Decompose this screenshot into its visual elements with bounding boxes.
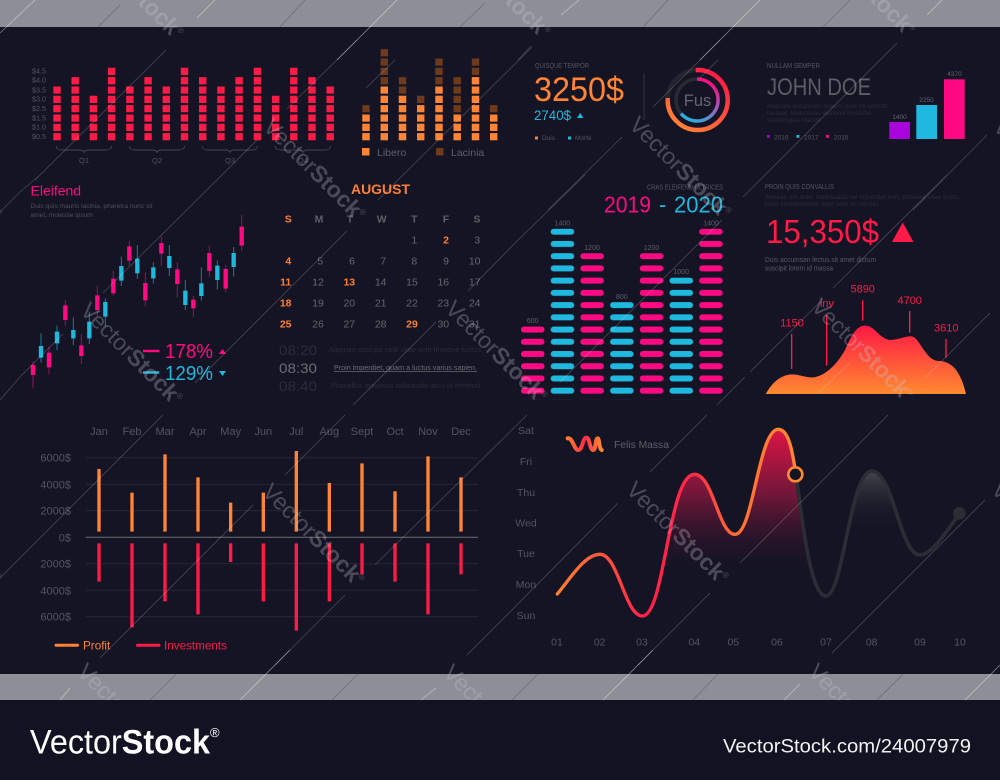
dates: 20 <box>343 298 355 310</box>
watermarks: VectorStock <box>72 658 181 767</box>
weekday headers: S <box>285 214 292 226</box>
watermarks: ® <box>907 22 918 33</box>
dates: 12 <box>312 276 324 288</box>
quarter labels <box>79 156 308 165</box>
month labels: Mar <box>156 426 175 438</box>
y axis labels: 4000$ <box>40 585 71 597</box>
pill values <box>527 220 719 325</box>
x axis numbers: 06 <box>771 637 783 649</box>
schedule: 08:40: 08:40 <box>279 378 317 394</box>
heading: QUISQUE TEMPOR <box>535 63 589 70</box>
panel: stacked square bars <box>362 49 494 159</box>
faint description: laoreet. Maecenas eleifend molestie <box>767 110 871 117</box>
panel: felis massa line chart <box>515 425 966 649</box>
faint description: Nam condimentum eget sem ut ultricies <box>765 201 880 208</box>
legend: libero: Libero <box>377 147 406 159</box>
bottom grey band <box>0 674 1000 700</box>
dates: 18 <box>280 298 292 310</box>
pill values: 600 <box>527 318 539 325</box>
dates: 17 <box>469 276 481 288</box>
legend label: Felis Massa <box>614 440 669 451</box>
dates: 25 <box>280 318 292 330</box>
faint description: Aenean elit ante, malesuada vel imperdiet non, posuere vitae turpis <box>765 194 960 201</box>
watermarks: ® <box>174 391 185 402</box>
quarter braces <box>56 146 331 153</box>
dates: 26 <box>312 318 324 330</box>
weekday headers: F <box>443 214 450 226</box>
dates: 29 <box>406 318 418 330</box>
x axis numbers: 01 <box>551 637 563 649</box>
pill columns <box>521 229 723 400</box>
dates: 13 <box>343 276 355 288</box>
main value: 3250$ <box>534 71 624 109</box>
dates: 6 <box>349 256 355 268</box>
y axis labels: 6000$ <box>40 453 71 465</box>
x axis numbers <box>551 637 966 649</box>
dates: 30 <box>437 318 449 330</box>
watermarks: ® <box>539 389 550 400</box>
footer image id: VectorStock.com/24007979 <box>723 737 971 758</box>
month title: AUGUST <box>351 181 410 197</box>
dates: 8 <box>411 256 417 268</box>
eyebrow: NULLAM SEMPER <box>767 63 820 70</box>
y axis labels: $4.0 <box>32 76 46 85</box>
quarter labels: Q4 <box>298 156 308 165</box>
pill values: 1400 <box>555 220 570 228</box>
legend: investments: Investments <box>164 640 227 653</box>
panel: 2019-2020 pill chart <box>521 184 723 400</box>
x axis numbers: 08 <box>866 637 878 649</box>
area chart <box>766 300 966 394</box>
panel: profit and investments chart <box>40 426 478 653</box>
dates: 22 <box>406 298 418 310</box>
weekday headers: T <box>347 214 354 226</box>
dates: 27 <box>343 318 355 330</box>
area labels <box>780 284 959 334</box>
schedule: 08:30 <box>279 360 477 376</box>
panel: candlestick chart <box>30 182 242 388</box>
description: Duis accumsan lectus sit amet dictum <box>765 257 876 264</box>
area labels: inv <box>820 298 835 310</box>
y axis labels <box>32 67 46 141</box>
dates: 16 <box>437 276 449 288</box>
panel: calendar <box>279 181 482 394</box>
pill values: 1400 <box>703 220 719 228</box>
x axis numbers: 10 <box>954 637 966 649</box>
bar chart: yearly: 2250 <box>919 97 934 104</box>
legend: morbi: Morbi <box>575 135 591 142</box>
y axis days <box>515 425 537 622</box>
dates: 5 <box>317 256 323 268</box>
dates: 14 <box>375 276 387 288</box>
month labels: Jul <box>289 426 303 438</box>
dates: 31 <box>469 318 481 330</box>
panel: john doe <box>767 63 965 142</box>
schedule: 08:40 <box>279 378 480 394</box>
weekday headers: S <box>473 214 481 226</box>
y axis labels: $2.5 <box>32 104 46 113</box>
footer logo: VectorStock <box>30 724 210 762</box>
dates: 1 <box>411 234 417 246</box>
month labels: Feb <box>123 426 141 438</box>
dates: 19 <box>312 298 324 310</box>
legend: profit: Profit <box>83 640 111 653</box>
faint description <box>765 194 960 208</box>
y axis labels <box>40 453 71 624</box>
y axis days: Mon <box>516 579 536 591</box>
x axis numbers: 09 <box>914 637 926 649</box>
watermarks: ® <box>356 572 367 583</box>
dates: 3 <box>474 234 480 246</box>
area labels: 4700 <box>897 295 922 307</box>
dates: 15 <box>406 276 418 288</box>
eyebrow: PROIN QUIS CONVALLIS <box>765 184 834 191</box>
watermarks: VectorStock <box>803 658 912 767</box>
description <box>30 203 153 219</box>
watermarks: ® <box>542 24 553 35</box>
legend: years: 2016 <box>774 134 789 142</box>
month labels: Sept <box>351 426 373 438</box>
month labels: Oct <box>386 426 404 438</box>
y axis labels: $3.5 <box>32 85 46 94</box>
year range heading <box>604 192 723 218</box>
pill values: 1200 <box>584 245 600 252</box>
y axis days: Thu <box>517 487 535 499</box>
watermarks: ® <box>723 205 734 216</box>
watermarks: ® <box>357 207 368 218</box>
description <box>765 257 876 272</box>
month labels <box>90 426 471 438</box>
schedule: 08:40: Phasellus maximus sollicitudin arcu id eleifend <box>331 383 480 390</box>
panel: quarterly square bars <box>32 67 331 165</box>
year range heading: - <box>659 192 666 218</box>
quarter labels: Q2 <box>152 156 162 165</box>
stat: 178 percent <box>143 341 226 363</box>
y axis labels: 2000$ <box>40 506 71 518</box>
top grey band <box>0 0 1000 27</box>
watermarks: VectorStock <box>624 111 733 220</box>
y axis labels: $3.0 <box>32 95 46 104</box>
x axis numbers: 03 <box>636 637 648 649</box>
schedule: 08:30: Proin imperdiet, quam a luctus varius sapien. <box>334 365 477 372</box>
line chart <box>557 429 966 616</box>
dates: 23 <box>437 298 449 310</box>
donut chart <box>668 70 728 130</box>
x axis numbers: 02 <box>594 637 606 649</box>
main value: 15,350$ <box>766 213 879 250</box>
month labels: Nov <box>418 426 438 438</box>
watermarks: VectorStock <box>75 297 184 406</box>
stat: 178 percent: 178% <box>165 341 213 363</box>
dates: 7 <box>380 256 386 268</box>
heading: Eleifend <box>30 182 81 198</box>
legend: duis: Duis <box>542 135 556 142</box>
dates: 9 <box>443 256 449 268</box>
month labels: Jun <box>254 426 272 438</box>
pill values: 800 <box>616 294 628 301</box>
dates: 28 <box>375 318 387 330</box>
month labels: May <box>220 426 242 438</box>
y axis labels: 2000$ <box>40 559 71 571</box>
dates <box>280 234 481 330</box>
footer logo: ® <box>210 725 220 740</box>
description: Duis quis mauris lacinia, pharetra nunc sit <box>30 203 153 210</box>
investment bars <box>99 543 461 631</box>
legend: profit <box>56 640 111 653</box>
dates: 24 <box>469 298 481 310</box>
stat: 129 percent: 129% <box>165 363 213 385</box>
x axis numbers: 04 <box>688 637 700 649</box>
icon: up triangle <box>577 113 584 118</box>
bar chart: yearly: 1400 <box>892 114 907 121</box>
y axis labels: $1.0 <box>32 123 46 132</box>
y axis days: Wed <box>515 518 537 530</box>
quarter labels: Q1 <box>79 156 89 165</box>
dates: 2 <box>443 234 449 246</box>
weekday headers: W <box>377 214 387 226</box>
icon: up triangle <box>892 222 914 242</box>
watermarks: VectorStock <box>806 293 915 402</box>
profit bars <box>99 451 461 532</box>
schedule: 08:20: 08:20 <box>279 342 317 358</box>
month labels: Apr <box>189 426 207 438</box>
year range heading: 2019 <box>604 192 651 218</box>
panel: quisque tempor stat <box>534 63 644 142</box>
secondary value: 2740$ <box>534 107 571 123</box>
x axis numbers: 07 <box>820 637 832 649</box>
y axis labels: $1.5 <box>32 113 46 122</box>
area labels: 1150 <box>780 318 804 330</box>
area labels: 5890 <box>850 284 875 296</box>
weekday headers <box>285 214 481 226</box>
watermarks: ® <box>175 25 186 36</box>
x axis numbers: 05 <box>727 637 739 649</box>
orange squares <box>366 77 494 140</box>
y axis labels: 4000$ <box>40 479 71 491</box>
year range heading: 2020 <box>674 192 723 218</box>
y axis days: Fri <box>520 456 532 468</box>
faint description <box>767 103 889 124</box>
watermarks: VectorStock <box>621 476 730 585</box>
pill values: 1000 <box>673 269 689 276</box>
weekday headers: T <box>411 214 418 226</box>
watermarks: VectorStock <box>258 113 367 222</box>
dates: 4 <box>285 256 291 268</box>
watermarks: VectorStock <box>438 659 547 768</box>
weekday headers: M <box>315 214 324 226</box>
schedule: 08:20 <box>279 342 482 358</box>
name heading: JOHN DOE <box>767 74 871 101</box>
y axis labels: $0.5 <box>32 132 46 141</box>
quarter labels: Q3 <box>225 156 235 165</box>
icon: wave logo <box>568 438 602 450</box>
eyebrow: CRAS ELEIFEND ULTRICES <box>647 184 723 192</box>
legend: lacinia: Lacinia <box>451 147 484 159</box>
dates: 11 <box>280 276 291 288</box>
y axis days: Tue <box>517 548 535 560</box>
donut chart: Fus <box>684 92 711 110</box>
schedule: 08:20: Aliquam suscipit velit vitae velit tristique luctus <box>329 347 482 354</box>
dates: 21 <box>375 298 387 310</box>
dates: 10 <box>469 256 481 268</box>
panel: proin quis convallis <box>765 184 966 394</box>
watermarks: VectorStock <box>440 295 549 404</box>
brown squares <box>366 49 494 140</box>
watermarks: ® <box>905 387 916 398</box>
faint description: scelerisque blandit <box>767 117 821 124</box>
footer strip <box>0 700 1000 780</box>
schedule: 08:30: 08:30 <box>279 360 317 376</box>
legend: years: 2017 <box>804 134 819 142</box>
faint description: Aliquam accumsan mauris quis mi sollicitu <box>767 103 889 110</box>
month labels: Jan <box>90 426 108 438</box>
month labels: Aug <box>320 426 339 438</box>
watermarks: VectorStock <box>257 478 366 587</box>
bar chart: yearly: 4370 <box>947 71 962 78</box>
bar chart: yearly <box>889 71 965 139</box>
y axis days: Sun <box>517 610 535 622</box>
candles <box>33 215 242 388</box>
area labels: 3610 <box>934 322 959 334</box>
description: suscipit lorem id massa <box>765 266 833 272</box>
legend: years <box>767 134 849 142</box>
stat: 129 percent <box>143 363 226 385</box>
watermarks: ® <box>720 570 731 581</box>
month labels: Dec <box>451 426 471 438</box>
red square columns <box>57 68 330 140</box>
description: amet, molestie ipsum <box>30 212 93 219</box>
y axis labels: 0$ <box>59 532 71 544</box>
legend: years: 2018 <box>834 134 849 142</box>
y axis days: Sat <box>518 425 534 437</box>
pill values: 1200 <box>644 245 659 252</box>
y axis labels: $4.5 <box>32 67 46 76</box>
y axis labels: 6000$ <box>40 612 71 624</box>
